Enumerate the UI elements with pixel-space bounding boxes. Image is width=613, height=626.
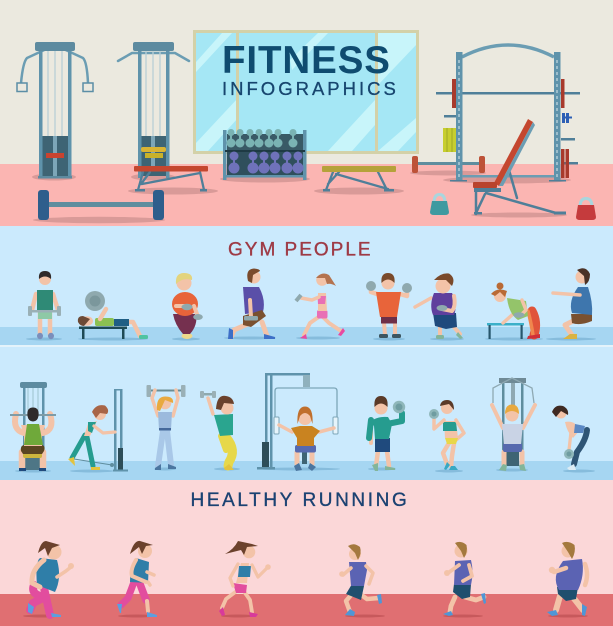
person: woman bikini dumbbell curl: [429, 400, 464, 472]
person: man orange shirt dumbbells: [366, 273, 412, 340]
heading: gym people: GYM PEOPLE: [228, 240, 373, 260]
person: man lat pulldown: [10, 382, 56, 472]
person: woman lunge dumbbell: [296, 274, 345, 340]
runner: slim man: [339, 544, 385, 618]
panel: gym room: [0, 0, 613, 226]
panel: gym people row two: [0, 347, 613, 480]
person: heavy woman dumbbell: [415, 273, 464, 340]
runner: slim woman: [219, 541, 271, 618]
person: woman deadlift: [552, 406, 595, 472]
person: woman overhead barbell: [146, 385, 186, 470]
person: woman shoulder press: [200, 391, 240, 470]
cable machine left: [17, 42, 93, 180]
runner: medium man: [443, 542, 486, 618]
person: woman one arm row: [485, 282, 543, 340]
heading: healthy running: HEALTHY RUNNING: [190, 490, 409, 511]
person: heavy woman curl: [172, 273, 203, 340]
title: INFOGRAPHICS: [222, 78, 399, 99]
dumbbell rack: [220, 129, 310, 182]
panel: gym people row one: [0, 226, 613, 347]
person: man lunge: [224, 268, 276, 340]
incline bench: [471, 119, 567, 218]
yellow bench: [314, 166, 404, 194]
person: man bench press: [78, 291, 148, 340]
runner: heavy woman: [23, 541, 74, 618]
person: muscular man teal shirt: [368, 396, 405, 471]
runner: medium woman: [117, 541, 157, 618]
red kettlebell: [576, 198, 596, 220]
person: woman cable crossover machine: [257, 373, 340, 471]
person: man with barbell: [26, 271, 62, 340]
squat rack with barbells: [410, 45, 580, 184]
person: woman cable kick: [68, 389, 128, 472]
person: man squat: [546, 268, 596, 340]
teal kettlebell: [430, 194, 449, 215]
person: man chest press machine: [492, 378, 535, 472]
red bench: [128, 166, 218, 194]
runner: heavy man: [547, 542, 588, 618]
window: [193, 30, 419, 154]
cable machine middle: [118, 42, 189, 180]
panel: healthy running: [0, 480, 613, 626]
title: [222, 39, 399, 99]
floor barbell: [33, 190, 165, 223]
title: FITNESS: [222, 39, 391, 82]
